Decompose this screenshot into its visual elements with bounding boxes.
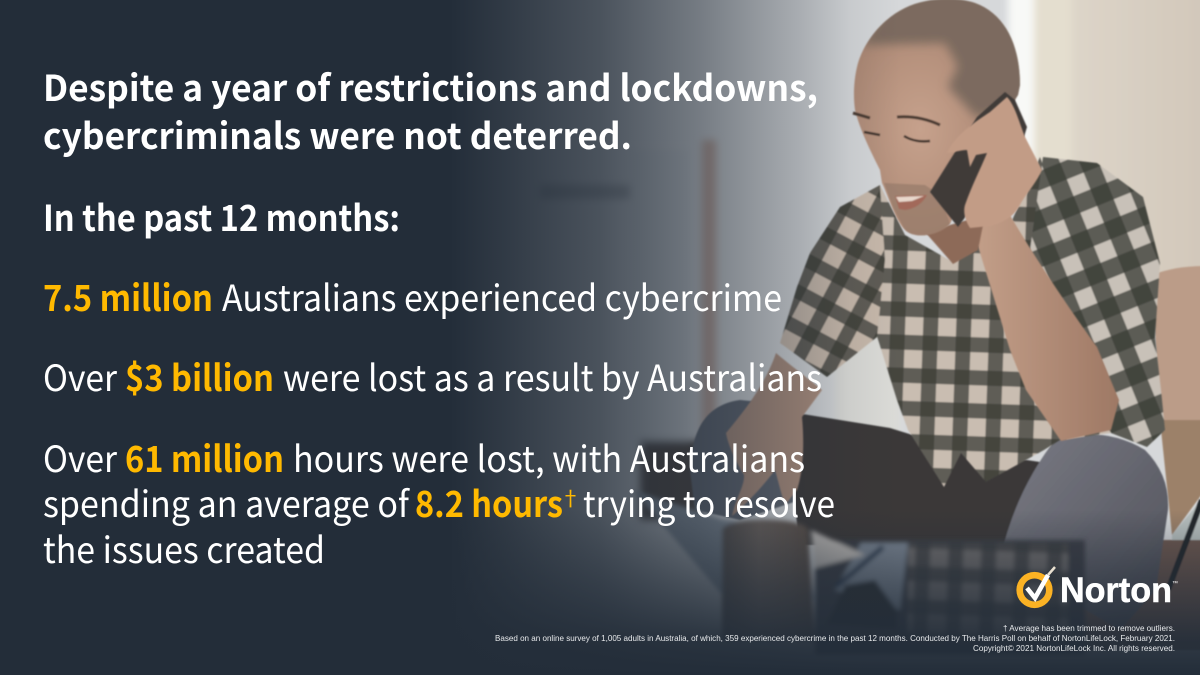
statistic: 61 million hours bbox=[43, 431, 835, 574]
right sleeve bbox=[1030, 157, 1165, 447]
sofa and chair bbox=[1060, 266, 1200, 650]
forearm resting on knee bbox=[970, 215, 1119, 441]
hair bbox=[865, 0, 1020, 120]
desk items bbox=[633, 490, 1085, 655]
statistic: $3 billion bbox=[43, 350, 822, 402]
neck bbox=[925, 215, 985, 264]
statistic: 61 million hours: 8.2 hours bbox=[415, 476, 563, 528]
Norton logo: Norton bbox=[1060, 571, 1172, 610]
room background bbox=[540, 0, 1200, 520]
statistic: $3 billion: were lost as a result by Australians bbox=[283, 350, 822, 402]
footnotes bbox=[495, 623, 1175, 653]
mouth bbox=[895, 195, 927, 210]
statistic: 61 million hours: spending an average of bbox=[43, 476, 410, 528]
statistic: 7.5 million: Australians experienced cybercrime bbox=[222, 270, 782, 322]
Norton logo bbox=[1020, 567, 1178, 610]
footnotes: Based on an online survey of 1,005 adults in Australia, of which, 359 experienced cybercrime in the past 12 months. Conducted by The Harris Poll on behalf of NortonLifeLock, February 2021. bbox=[495, 633, 1175, 643]
statistic: 61 million hours: hours were lost, with Australians bbox=[293, 431, 805, 483]
trousers and knees bbox=[690, 400, 1168, 630]
hand on desk bbox=[726, 353, 822, 516]
head bbox=[853, 0, 1040, 235]
footnotes: Copyright© 2021 NortonLifeLock Inc. All rights reserved. bbox=[973, 643, 1175, 653]
statistic: 61 million hours: Over bbox=[43, 431, 118, 483]
brows and eyes bbox=[853, 113, 940, 125]
dark gradient overlay from bottom bbox=[0, 510, 1200, 675]
dark gradient overlay from left bbox=[0, 0, 900, 675]
statistic: 61 million hours: the issues created bbox=[43, 522, 325, 574]
statistic: 7.5 million: 7.5 million bbox=[43, 270, 213, 322]
photo: man on the phone at a desk bbox=[482, 0, 1200, 654]
statistic: 61 million hours: 61 million bbox=[125, 431, 284, 483]
footnotes: † Average has been trimmed to remove outliers. bbox=[1003, 623, 1175, 633]
shirt bbox=[780, 157, 1165, 487]
heading: cybercriminals were not deterred. bbox=[43, 108, 632, 160]
stubble bbox=[884, 183, 950, 235]
phone bbox=[930, 92, 1027, 227]
subheading: In the past 12 months: bbox=[43, 190, 400, 242]
icon: checkmark seal bbox=[1020, 567, 1055, 605]
left sleeve bbox=[780, 185, 885, 377]
Norton logo: ™ bbox=[1172, 580, 1178, 587]
heading: Despite a year of restrictions and lockdowns, bbox=[43, 60, 818, 112]
statistic: 61 million hours: † bbox=[560, 483, 581, 513]
hand holding phone bbox=[947, 97, 1042, 228]
statistic: $3 billion: $3 billion bbox=[125, 350, 274, 402]
statistic: $3 billion: Over bbox=[43, 350, 118, 402]
statistic: 61 million hours: trying to resolve bbox=[583, 476, 835, 528]
shirt body bbox=[860, 157, 1111, 487]
heading bbox=[43, 60, 818, 160]
